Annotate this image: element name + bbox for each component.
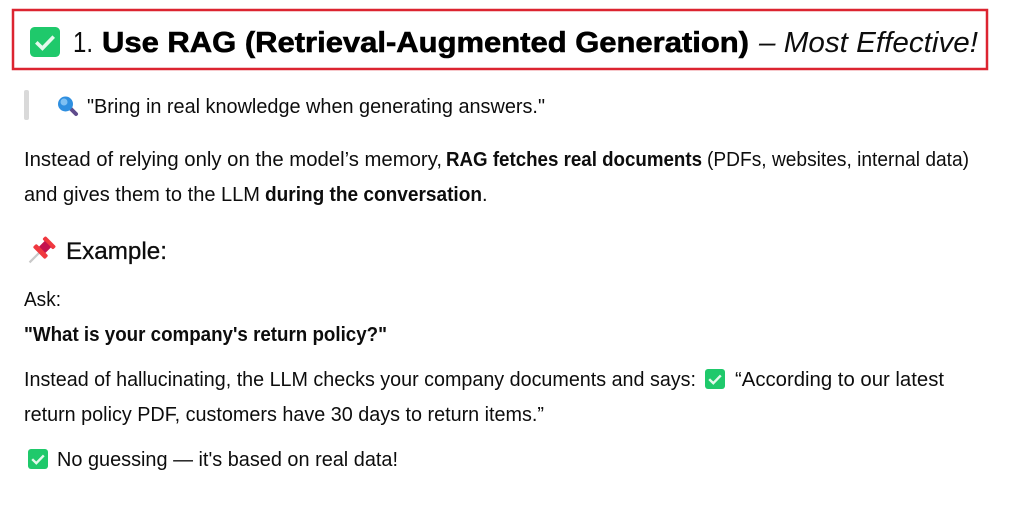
paragraph: answer: return policy PDF, customers have 30 days to return items.” [24,404,544,426]
icon: green check conclusion [28,449,48,469]
text: question: "What is your company's return policy?" [24,324,387,346]
heading italic text: – Most Effective! [758,27,978,59]
conclusion [28,449,398,471]
paragraph: RAG explanation: Instead of relying only on the model’s memory, [24,149,442,171]
title box: red outline [13,10,987,69]
paragraph: answer: “According to our latest [735,369,944,391]
paragraph: RAG explanation: (PDFs, websites, internal data) [707,149,969,171]
paragraph: RAG explanation [24,149,969,206]
paragraph: RAG explanation: RAG fetches real documents [446,149,702,171]
blockquote [24,90,545,120]
paragraph: RAG explanation: . [482,184,488,206]
paragraph: answer: Instead of hallucinating, the LLM checks your company documents and says: [24,369,696,391]
icon: green check small [705,369,725,389]
heading: Use RAG [30,27,978,59]
heading number: 1. [73,27,93,59]
heading bold text: Use RAG (Retrieval-Augmented Generation) [102,27,749,59]
icon: pushpin [24,235,57,268]
text: Ask: Ask: [24,289,61,311]
paragraph: RAG explanation: and gives them to the LLM [24,184,260,206]
paragraph: answer [24,369,944,426]
conclusion text: No guessing — it's based on real data! [57,449,398,471]
quote text: "Bring in real knowledge when generating answers." [87,96,545,118]
paragraph: RAG explanation: during the conversation [265,184,482,206]
icon: green check [30,27,60,57]
subheading: Example [24,235,167,268]
subheading text: Example: [66,238,167,265]
icon: magnifying glass [58,96,76,114]
blockquote bar [24,90,29,120]
